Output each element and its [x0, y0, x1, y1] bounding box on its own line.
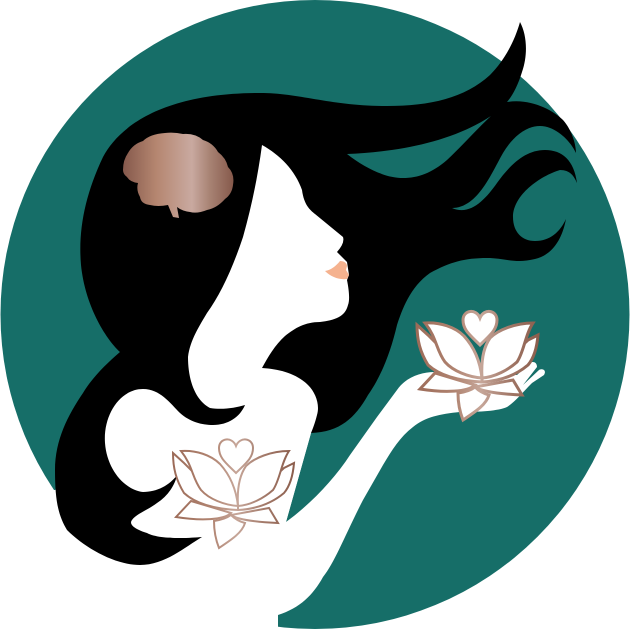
- lips: [325, 261, 349, 279]
- chest right big petal: [238, 451, 289, 506]
- black flowing hair: [55, 22, 577, 565]
- chest left big petal: [181, 451, 238, 506]
- icon: rose gold brain: [123, 133, 233, 218]
- chest lotus heart: [219, 439, 253, 473]
- chest lower left petal: [176, 501, 231, 519]
- lower left petal: [420, 373, 475, 391]
- chest outer right petal: [238, 463, 294, 510]
- lotus in hand: [417, 311, 538, 420]
- outer right petal: [482, 335, 538, 382]
- outer left petal: [417, 325, 482, 382]
- lower right petal: [475, 380, 522, 395]
- chest bottom petal: [214, 515, 245, 548]
- bottom petal: [458, 387, 489, 420]
- white body and arm with hand: [0, 362, 545, 629]
- chest lower right petal: [231, 508, 278, 523]
- lotus on chest: [173, 439, 294, 548]
- left big petal: [425, 323, 482, 378]
- chest outer left petal: [173, 453, 238, 510]
- teal inlet between hair locks: [347, 116, 491, 178]
- right big petal: [482, 323, 533, 378]
- lotus heart: [463, 311, 497, 345]
- white face, neck and shoulder: [105, 145, 349, 538]
